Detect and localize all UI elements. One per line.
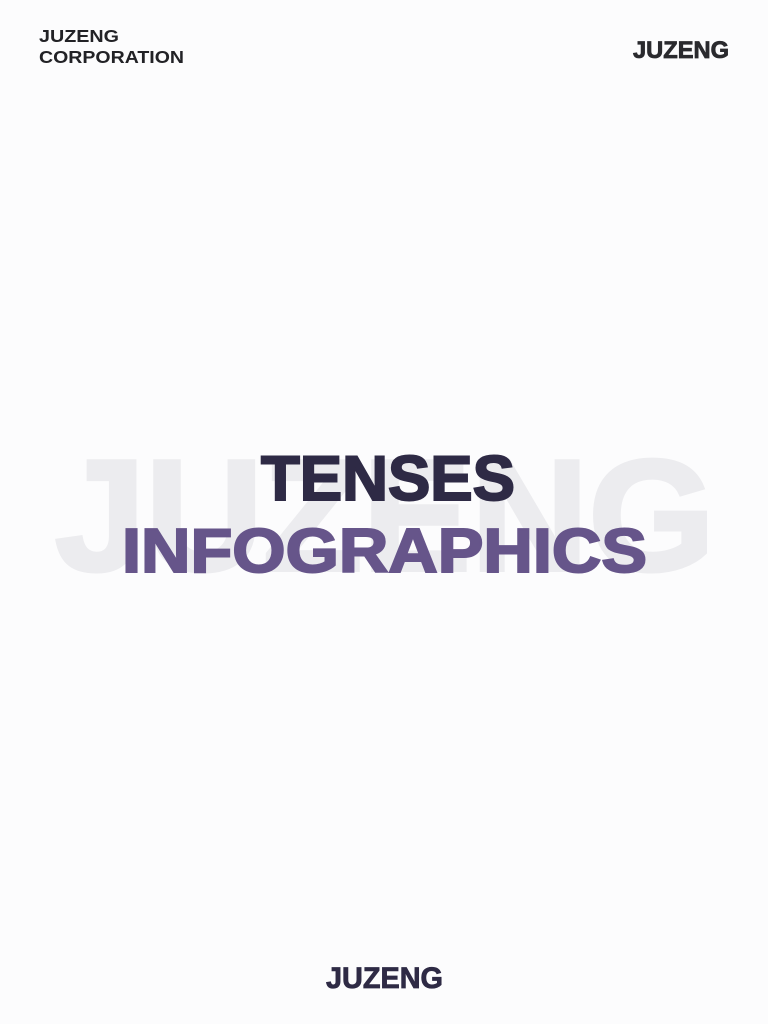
title: TENSES bbox=[261, 444, 515, 514]
watermark: JUZENG: JUZENG bbox=[55, 428, 715, 604]
logo: top right: JUZENG bbox=[633, 37, 729, 64]
header: company name bbox=[39, 26, 184, 67]
header: company name: CORPORATION bbox=[39, 47, 184, 67]
title: INFOGRAPHICS bbox=[122, 517, 647, 586]
logo: bottom: JUZENG bbox=[326, 962, 443, 995]
header: company name: JUZENG bbox=[39, 26, 119, 46]
title bbox=[122, 444, 647, 586]
